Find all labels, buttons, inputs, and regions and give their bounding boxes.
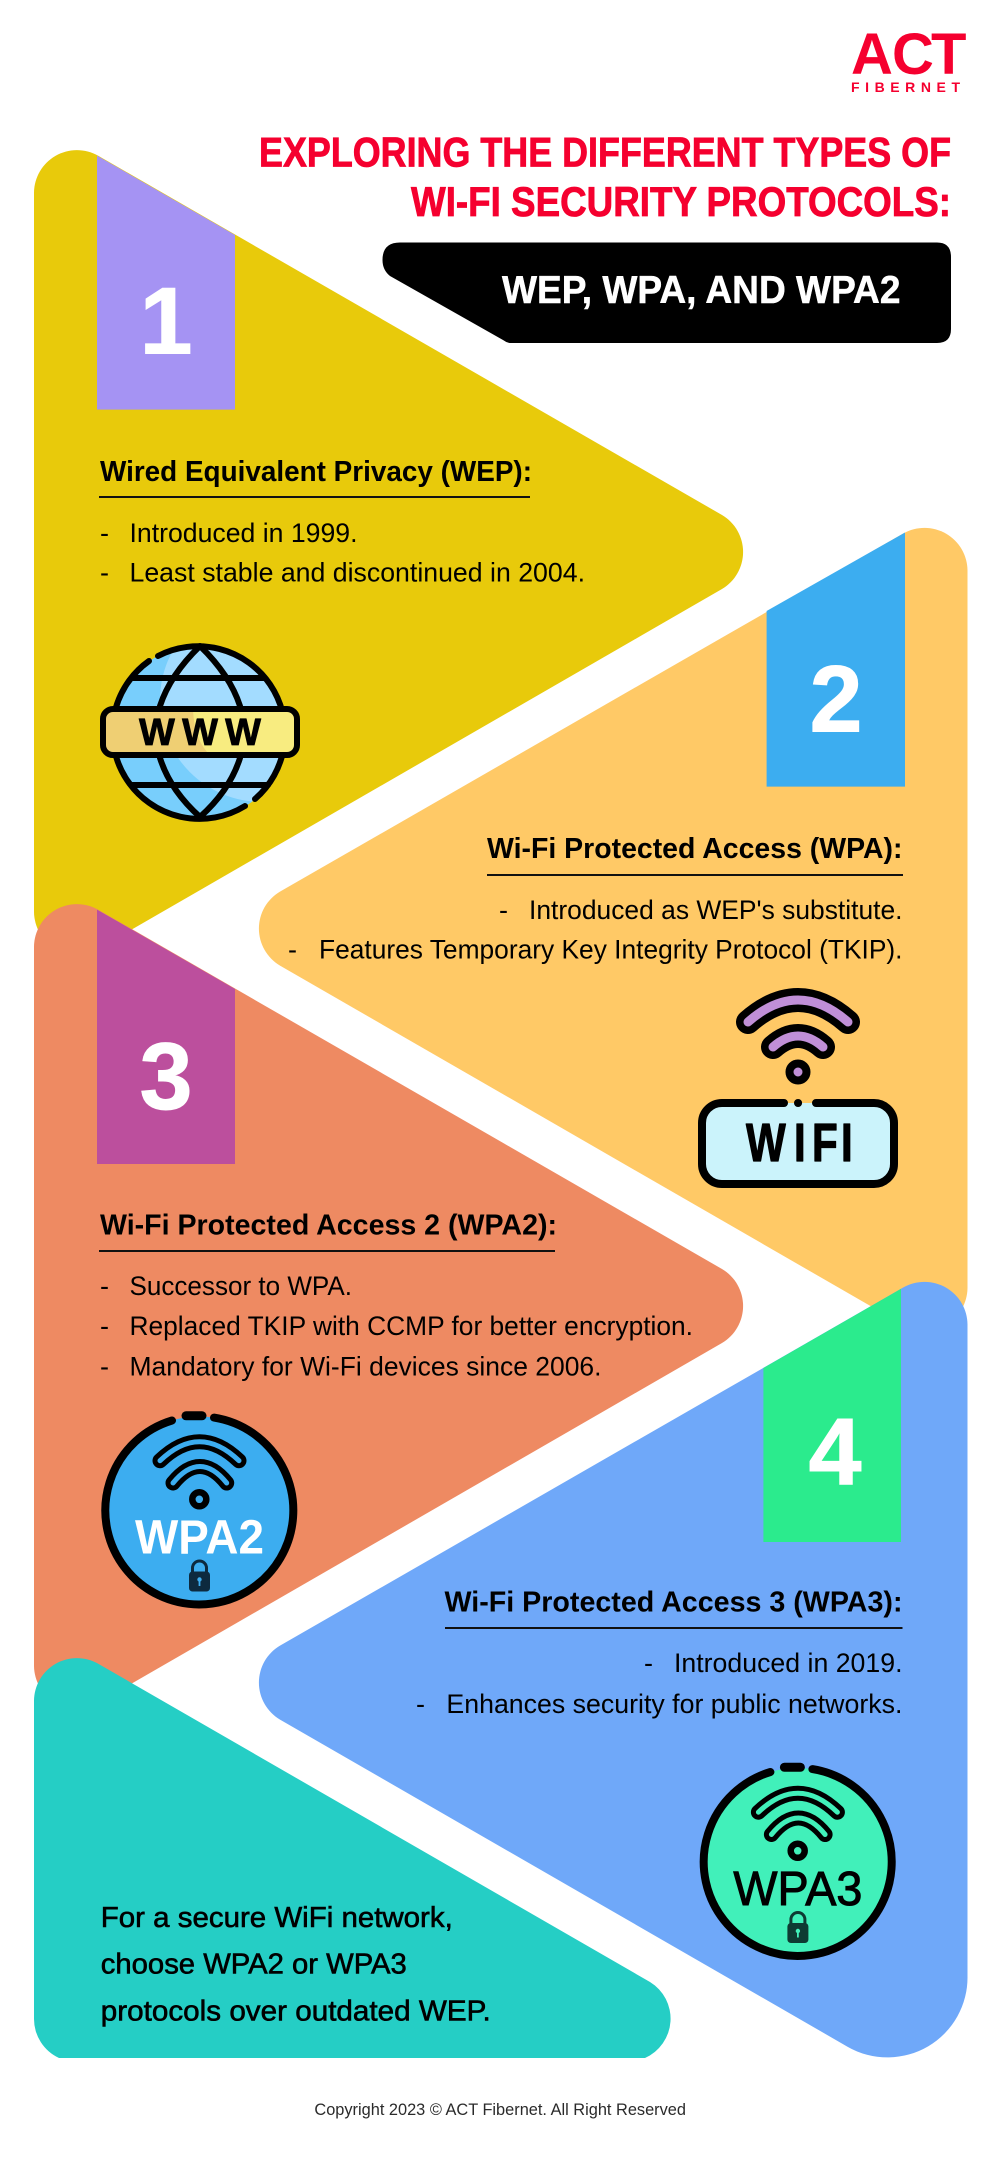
- bullet list: WPA2: -: [100, 1311, 109, 1341]
- number badge 2: [767, 532, 905, 787]
- panel 4 background: [259, 1282, 968, 2057]
- icon: WPA2 badge: [105, 1416, 293, 1604]
- bullet list: WPA: -: [288, 934, 297, 964]
- number badge 1: 1: [140, 269, 192, 375]
- conclusion text: [101, 1902, 491, 2028]
- icon: WIFI sign: WIFI: [746, 1113, 853, 1173]
- panel 1: WEP: [34, 150, 743, 954]
- logo: ACT Fibernet: ACT: [851, 22, 966, 87]
- bullet list: WPA: Introduced as WEP's substitute.: [529, 895, 902, 925]
- number badge 2: 2: [810, 646, 862, 752]
- footer copyright: Copyright 2023 © ACT Fibernet. All Right Reserved: [314, 2100, 686, 2119]
- icon: WWW globe: [100, 643, 300, 822]
- bullet list: WEP: -: [100, 518, 109, 548]
- subtitle banner: [382, 242, 951, 343]
- bullet list: WEP: [100, 518, 585, 588]
- panel 4: WPA3: [259, 1282, 968, 2057]
- bullet list: WPA2: Successor to WPA.: [130, 1271, 352, 1301]
- panel 3 background: [34, 904, 743, 1708]
- bullet list: WEP: Least stable and discontinued in 2004.: [130, 558, 585, 588]
- icon: WWW globe: WWW: [139, 712, 261, 754]
- number badge 4: 4: [809, 1400, 862, 1506]
- bullet list: WPA2: -: [100, 1352, 109, 1382]
- number badge 1: [97, 156, 235, 410]
- conclusion text: protocols over outdated WEP.: [101, 1996, 491, 2028]
- bullet list: WPA3: -: [644, 1648, 653, 1678]
- icon: WPA2 badge: WPA2: [135, 1512, 264, 1564]
- heading: WPA2: Wi-Fi Protected Access 2 (WPA2):: [100, 1210, 557, 1242]
- panel 5 background: [34, 1658, 671, 2058]
- bullet list: WPA: Features Temporary Key Integrity Protocol (TKIP).: [319, 934, 902, 964]
- bullet list: WEP: Introduced in 1999.: [130, 518, 358, 548]
- conclusion text: For a secure WiFi network,: [101, 1902, 453, 1934]
- number badge 3: 3: [140, 1024, 192, 1130]
- number badge 4: [763, 1289, 901, 1542]
- heading: WPA3: Wi-Fi Protected Access 3 (WPA3):: [444, 1587, 902, 1619]
- panel 3: WPA2: [34, 904, 743, 1708]
- panel 2: WPA: [259, 528, 968, 1331]
- panel 5: conclusion: [34, 1658, 671, 2058]
- bullet list: WPA: -: [499, 895, 508, 925]
- bullet list: WPA2: -: [100, 1271, 109, 1301]
- bullet list: WPA3: [416, 1648, 902, 1719]
- icon: WPA3 badge: WPA3: [733, 1863, 862, 1916]
- number badge 3: [97, 910, 235, 1164]
- conclusion text: choose WPA2 or WPA3: [101, 1949, 407, 1981]
- bullet list: WPA3: Introduced in 2019.: [674, 1648, 902, 1678]
- subtitle banner: WEP, WPA, AND WPA2: [502, 269, 900, 312]
- title: [259, 128, 951, 225]
- logo: ACT Fibernet: FIBERNET: [851, 79, 960, 95]
- bullet list: WPA2: Mandatory for Wi-Fi devices since 2006.: [130, 1352, 602, 1382]
- heading: WEP: Wired Equivalent Privacy (WEP):: [100, 456, 532, 488]
- bullet list: WPA2: [100, 1271, 693, 1382]
- icon: WIFI sign: [702, 1000, 894, 1184]
- bullet list: WPA3: -: [416, 1689, 425, 1719]
- bullet list: WPA3: Enhances security for public networks.: [446, 1689, 902, 1719]
- panel 2 background: [259, 528, 968, 1331]
- bullet list: WPA: [288, 895, 902, 964]
- bullet list: WEP: -: [100, 558, 109, 588]
- bullet list: WPA2: Replaced TKIP with CCMP for better encryption.: [130, 1311, 693, 1341]
- panel 1 background: [34, 150, 743, 954]
- icon: WPA3 badge: [704, 1767, 892, 1956]
- heading: WPA: Wi-Fi Protected Access (WPA):: [487, 833, 902, 865]
